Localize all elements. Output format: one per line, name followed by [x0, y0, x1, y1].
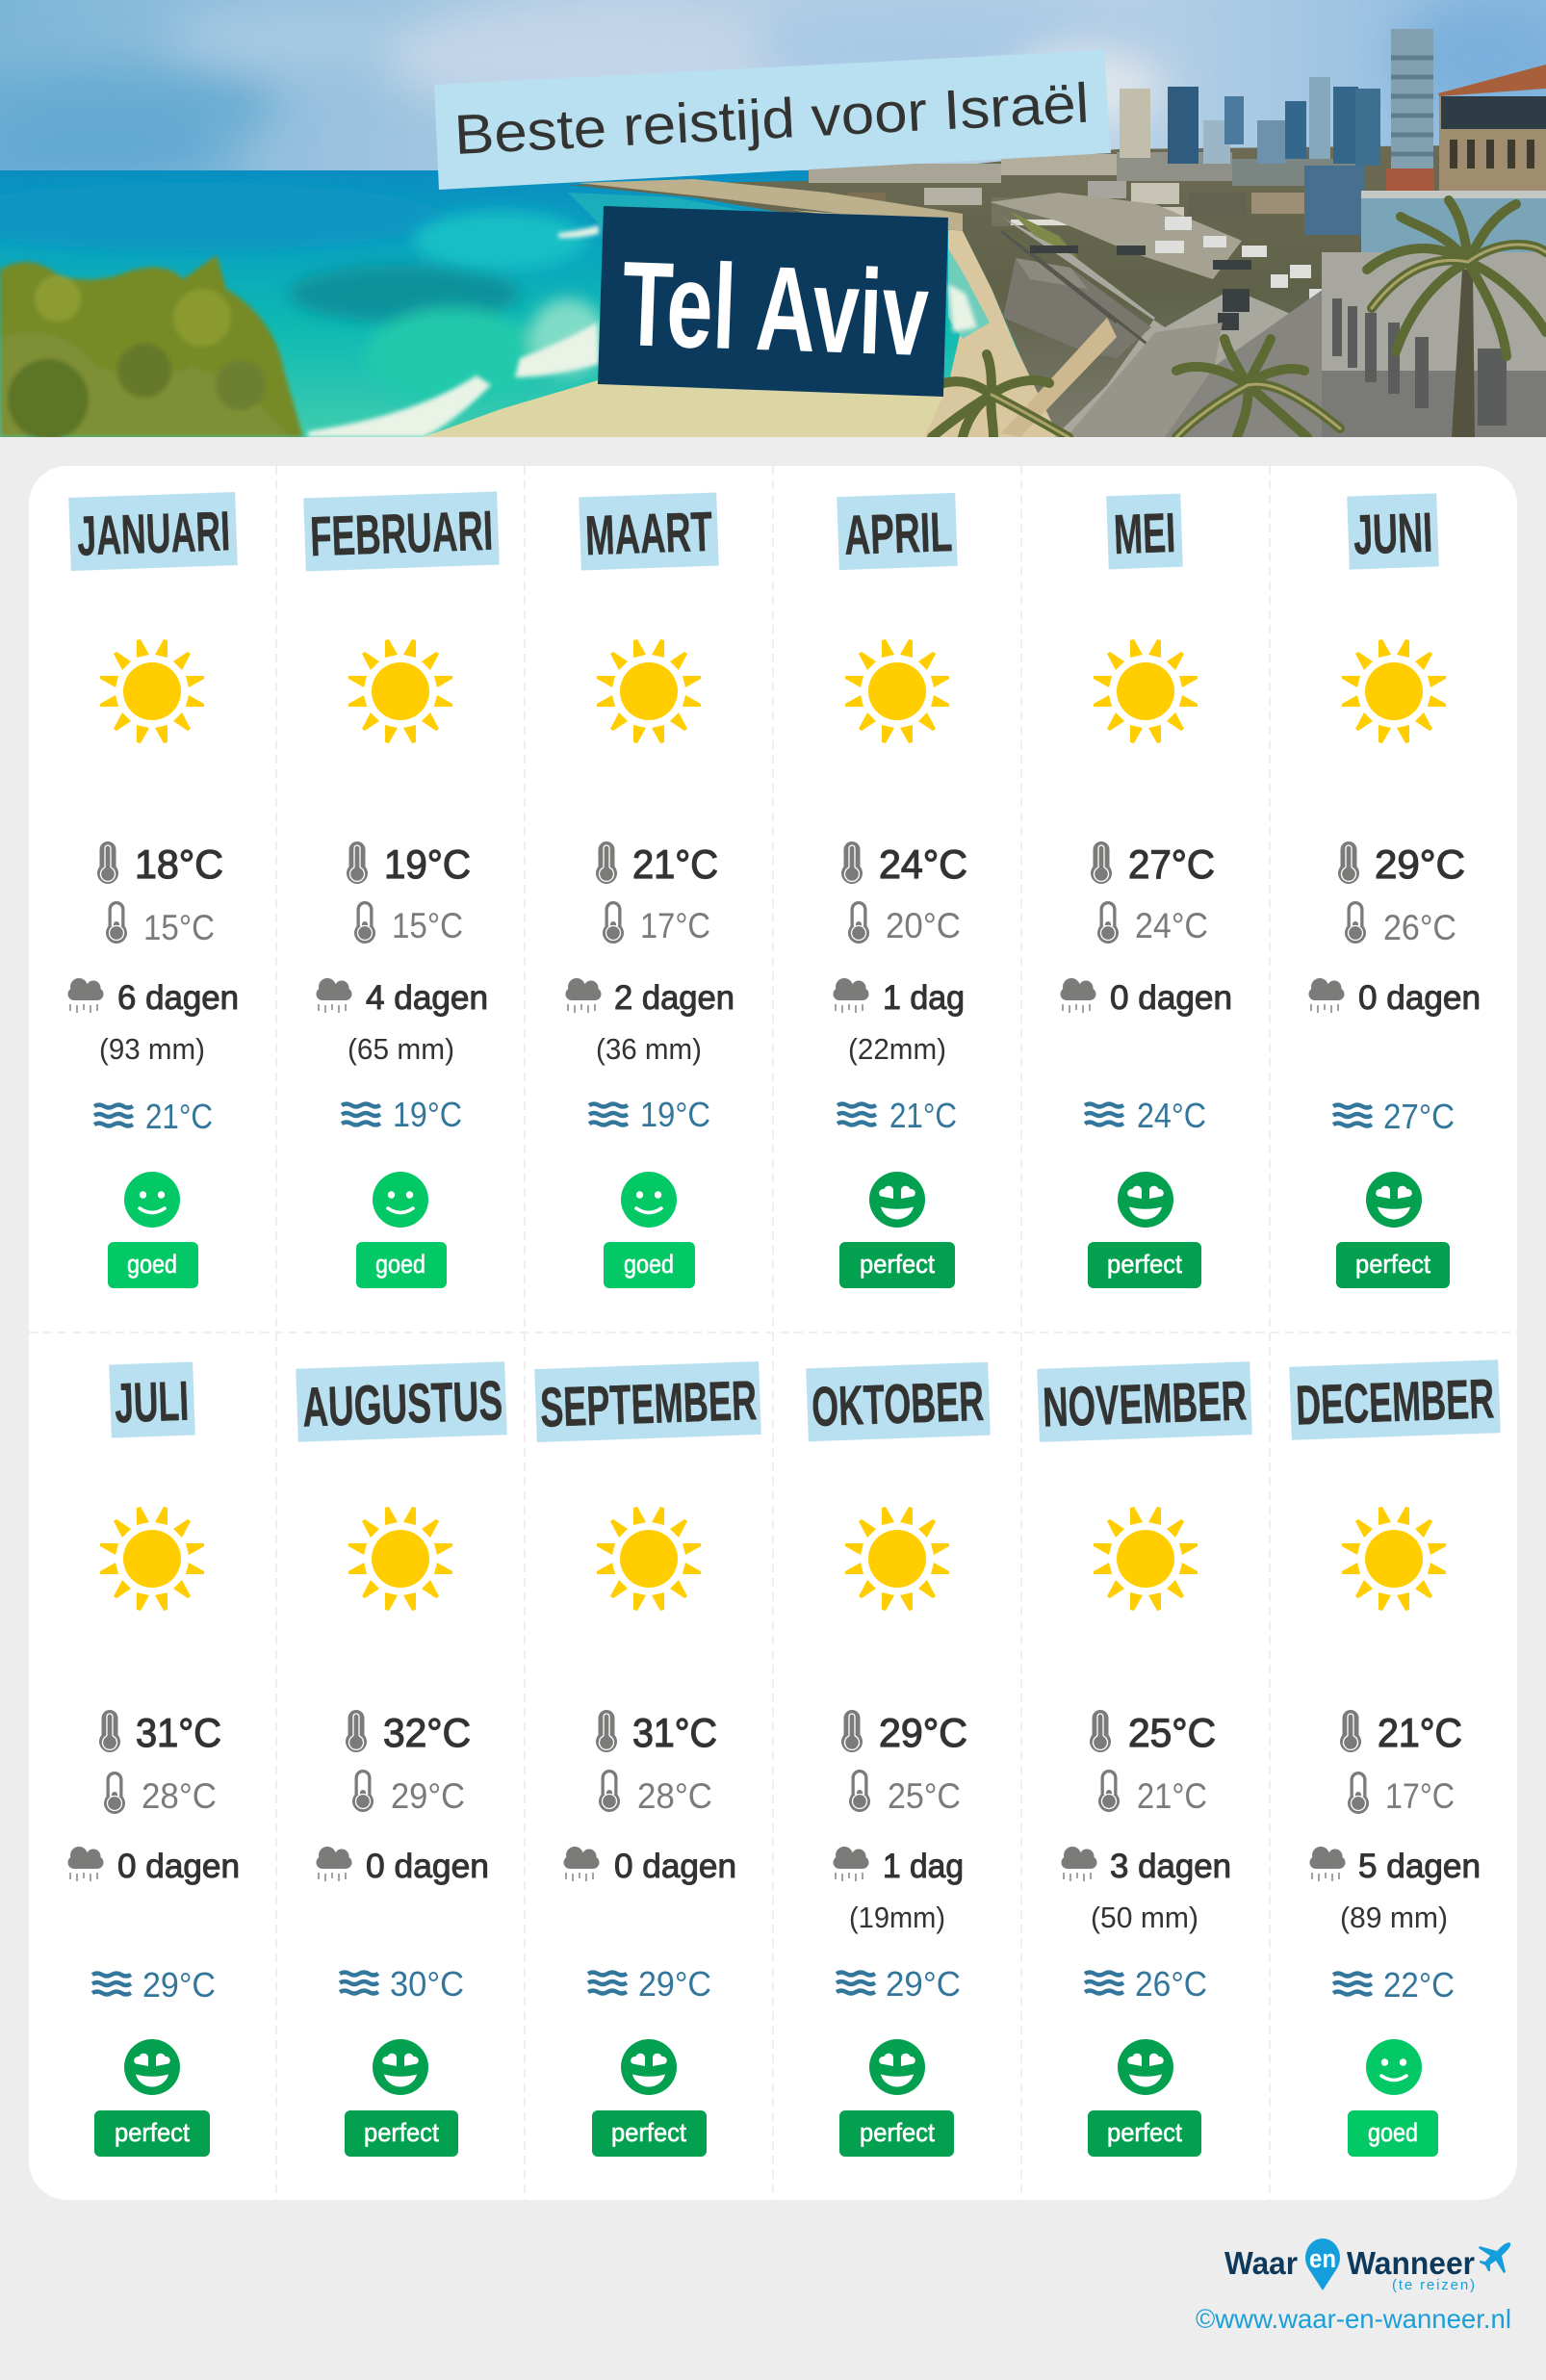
- rain days: 0 dagen: [1110, 979, 1232, 1017]
- icon: perfect face: [1366, 1172, 1422, 1228]
- glass building and right building: [1361, 198, 1546, 252]
- icon: thermometer max: [97, 841, 118, 884]
- icon: rain cloud: [564, 1847, 599, 1881]
- min temperature: 21°C: [1137, 1776, 1207, 1816]
- rating tag: perfect: [115, 2118, 190, 2147]
- panel: oktober: [806, 1362, 991, 2157]
- min temperature: 28°C: [142, 1776, 217, 1816]
- min temperature: 29°C: [391, 1776, 465, 1816]
- icon: good face: [124, 1172, 180, 1228]
- rating tag: perfect: [860, 2118, 935, 2147]
- min temperature: 24°C: [1135, 906, 1208, 945]
- max temperature: 25°C: [1128, 1710, 1216, 1755]
- icon: rain cloud: [834, 978, 868, 1013]
- rain days: 2 dagen: [614, 979, 734, 1017]
- max temperature: 27°C: [1128, 841, 1215, 887]
- icon: perfect face: [373, 2039, 428, 2095]
- icon: sun: [348, 639, 452, 743]
- icon: perfect face: [1118, 2039, 1173, 2095]
- panel: juni: [1309, 493, 1481, 1288]
- icon: thermometer min: [599, 1770, 620, 1812]
- icon: waves: [1333, 1974, 1372, 1995]
- month label: [68, 492, 238, 571]
- icon: airplane: [1479, 2242, 1510, 2273]
- city banner: [598, 206, 948, 397]
- icon: sun: [597, 1507, 701, 1611]
- icon: sun: [845, 639, 949, 743]
- rating tag: [592, 2110, 707, 2157]
- rainfall: (36 mm): [596, 1032, 702, 1066]
- icon: waves: [340, 1972, 378, 1993]
- logo: Waar en Wanneer: Wanneer: [1347, 2245, 1475, 2281]
- rating tag: perfect: [1355, 1250, 1430, 1279]
- icon: rain cloud: [1309, 1847, 1346, 1881]
- sea temperature: 24°C: [1137, 1096, 1206, 1135]
- icon: waves: [94, 1105, 133, 1126]
- rating tag: [839, 2110, 954, 2157]
- panel: september: [534, 1361, 761, 2157]
- rating tag: goed: [375, 1250, 425, 1279]
- icon: thermometer min: [849, 1770, 870, 1812]
- sea temperature: 30°C: [390, 1964, 464, 2004]
- panel: november: [1037, 1361, 1252, 2157]
- rainfall: (89 mm): [1340, 1901, 1448, 1934]
- month label: [109, 1362, 195, 1437]
- icon: thermometer max: [99, 1710, 120, 1752]
- icon: thermometer min: [1345, 901, 1366, 944]
- rating tag: [345, 2110, 458, 2157]
- rating tag: [1348, 2110, 1438, 2157]
- icon: thermometer min: [1348, 1772, 1369, 1814]
- month label: [303, 492, 500, 571]
- skyline: [1120, 29, 1433, 168]
- rain days: 5 dagen: [1358, 1848, 1481, 1885]
- rating tag: goed: [1368, 2118, 1418, 2147]
- trees foreground: [0, 255, 303, 440]
- icon: sun: [348, 1507, 452, 1611]
- icon: sun: [1094, 1507, 1198, 1611]
- icon: sun: [1094, 639, 1198, 743]
- sea temperature: 29°C: [886, 1964, 961, 2004]
- logo: Waar en Wanneer: (te reizen): [1392, 2277, 1475, 2293]
- month label: MEI: [1113, 502, 1176, 566]
- month label: [1347, 493, 1439, 570]
- city land: [568, 145, 1439, 428]
- max temperature: 21°C: [632, 841, 718, 887]
- icon: thermometer min: [104, 1772, 125, 1814]
- sea temperature: 21°C: [145, 1097, 213, 1136]
- title text: Beste reistijd voor Israël: [452, 72, 1091, 167]
- sea temperature: 21°C: [889, 1096, 957, 1135]
- icon: rain cloud: [566, 978, 601, 1013]
- icon: thermometer min: [1098, 1770, 1120, 1812]
- max temperature: 29°C: [1375, 841, 1465, 887]
- icon: thermometer max: [1338, 841, 1359, 884]
- month label: [1037, 1361, 1252, 1442]
- icon: rain cloud: [67, 978, 104, 1013]
- icon: perfect face: [869, 2039, 925, 2095]
- icon: good face: [621, 1172, 677, 1228]
- icon: rain cloud: [1061, 1847, 1097, 1881]
- icon: waves: [1085, 1103, 1123, 1125]
- panel: maart: [566, 493, 734, 1288]
- rain days: 4 dagen: [366, 979, 488, 1017]
- icon: good face: [1366, 2039, 1422, 2095]
- month label: JANUARI: [76, 500, 231, 568]
- month label: [534, 1361, 761, 1442]
- sea temperature: 19°C: [640, 1095, 710, 1134]
- min temperature: 25°C: [888, 1776, 961, 1816]
- panel: december: [1289, 1359, 1501, 2157]
- logo: Waar en Wanneer: en: [1309, 2244, 1336, 2273]
- min temperature: 15°C: [143, 908, 215, 947]
- rain days: 1 dag: [883, 1848, 964, 1885]
- max temperature: 19°C: [384, 841, 471, 887]
- icon: thermometer max: [841, 1710, 863, 1752]
- rating tag: perfect: [1107, 2118, 1182, 2147]
- min temperature: 17°C: [640, 906, 710, 945]
- palm trees: [1452, 270, 1475, 437]
- month label: [806, 1362, 991, 1441]
- min temperature: 20°C: [886, 906, 961, 945]
- icon: thermometer max: [346, 1710, 367, 1752]
- icon: rain cloud: [316, 978, 352, 1013]
- min temperature: 28°C: [637, 1776, 712, 1816]
- rain days: 0 dagen: [1358, 979, 1481, 1017]
- month label: FEBRUARI: [309, 500, 494, 568]
- icon: thermometer min: [106, 901, 127, 944]
- icon: rain cloud: [67, 1847, 104, 1881]
- low city blocks: [809, 152, 1434, 235]
- rating tag: goed: [127, 1250, 177, 1279]
- rainfall: (65 mm): [348, 1032, 454, 1066]
- min temperature: 26°C: [1383, 908, 1456, 947]
- panel: mei: [1061, 494, 1232, 1288]
- people and cars: [1155, 217, 1322, 298]
- panel: april: [834, 493, 967, 1288]
- sea temperature: 29°C: [142, 1965, 216, 2005]
- website url: ©www.waar-en-wanneer.nl: [1196, 2304, 1511, 2334]
- max temperature: 31°C: [632, 1710, 717, 1755]
- month label: [579, 493, 719, 570]
- month label: SEPTEMBER: [539, 1369, 758, 1439]
- month label: JULI: [114, 1370, 190, 1435]
- sand beaches: [789, 210, 1059, 437]
- icon: thermometer min: [848, 901, 869, 944]
- max temperature: 24°C: [879, 841, 967, 887]
- teal strip and foam: [948, 248, 990, 339]
- month label: [1106, 494, 1183, 569]
- icon: thermometer max: [596, 841, 617, 884]
- rating tag: perfect: [1107, 1250, 1182, 1279]
- coastal wall and promenade: [992, 212, 1300, 437]
- panel: januari: [67, 492, 239, 1288]
- icon: sun: [1342, 1507, 1446, 1611]
- tan building with roof: [1439, 96, 1546, 197]
- rating tag: [356, 1242, 447, 1288]
- icon: waves: [837, 1972, 875, 1993]
- icon: perfect face: [621, 2039, 677, 2095]
- rain days: 1 dag: [883, 979, 965, 1017]
- rainfall: (19mm): [849, 1901, 945, 1934]
- max temperature: 32°C: [383, 1710, 471, 1755]
- rainfall: (50 mm): [1091, 1901, 1198, 1934]
- icon: thermometer max: [1091, 841, 1112, 884]
- logo: Waar en Wanneer: Waar: [1224, 2245, 1298, 2281]
- city name: Tel Aviv: [620, 237, 931, 381]
- rain days: 0 dagen: [366, 1848, 489, 1885]
- rating tag: [94, 2110, 210, 2157]
- icon: sun: [597, 639, 701, 743]
- logo: Waar en Wanneer: [1224, 2238, 1510, 2293]
- icon: thermometer max: [1090, 1710, 1111, 1752]
- month label: NOVEMBER: [1042, 1369, 1248, 1439]
- rating tag: [1336, 1242, 1450, 1288]
- icon: map pin: [1305, 2238, 1340, 2290]
- rainfall: (22mm): [848, 1032, 946, 1066]
- month label: MAART: [584, 501, 713, 567]
- icon: waves: [837, 1103, 876, 1125]
- icon: thermometer min: [352, 1770, 374, 1812]
- rain days: 6 dagen: [117, 979, 239, 1017]
- month label: [837, 493, 958, 570]
- rating tag: goed: [624, 1250, 674, 1279]
- rating tag: perfect: [364, 2118, 439, 2147]
- sea temperature: 19°C: [393, 1095, 462, 1134]
- icon: perfect face: [869, 1172, 925, 1228]
- icon: waves: [588, 1972, 627, 1993]
- icon: waves: [92, 1974, 131, 1995]
- month label: [296, 1361, 507, 1442]
- icon: thermometer min: [1097, 901, 1119, 944]
- icon: waves: [1085, 1972, 1123, 1993]
- sea temperature: 26°C: [1135, 1964, 1207, 2004]
- icon: perfect face: [1118, 1172, 1173, 1228]
- min temperature: 17°C: [1385, 1776, 1455, 1816]
- icon: waves: [342, 1103, 380, 1125]
- icon: thermometer min: [354, 901, 375, 944]
- icon: sun: [100, 639, 204, 743]
- rain days: 0 dagen: [117, 1848, 240, 1885]
- calendar card: [29, 466, 1517, 2200]
- icon: perfect face: [124, 2039, 180, 2095]
- rating tag: [604, 1242, 695, 1288]
- month label: APRIL: [843, 501, 953, 567]
- icon: rain cloud: [1309, 978, 1344, 1013]
- sea temperature: 27°C: [1383, 1097, 1455, 1136]
- panel: februari: [303, 492, 500, 1288]
- rating tag: perfect: [611, 2118, 686, 2147]
- month label: JUNI: [1353, 502, 1433, 566]
- max temperature: 29°C: [879, 1710, 967, 1755]
- icon: thermometer max: [347, 841, 368, 884]
- rain days: 3 dagen: [1110, 1848, 1231, 1885]
- icon: thermometer max: [841, 841, 863, 884]
- rainfall: (93 mm): [99, 1032, 205, 1066]
- max temperature: 21°C: [1378, 1710, 1462, 1755]
- sea temperature: 22°C: [1383, 1965, 1455, 2005]
- rating tag: [839, 1242, 955, 1288]
- header photo: Tel Aviv coast: [0, 0, 1546, 440]
- icon: thermometer max: [596, 1710, 617, 1752]
- icon: waves: [589, 1103, 628, 1125]
- icon: sun: [1342, 639, 1446, 743]
- max temperature: 18°C: [135, 841, 223, 887]
- icon: rain cloud: [1061, 978, 1095, 1013]
- month label: OKTOBER: [811, 1370, 985, 1438]
- icon: good face: [373, 1172, 428, 1228]
- icon: waves: [1333, 1105, 1372, 1126]
- icon: sun: [100, 1507, 204, 1611]
- icon: rain cloud: [834, 1847, 868, 1881]
- panel: juli: [67, 1362, 240, 2157]
- rain days: 0 dagen: [614, 1848, 736, 1885]
- min temperature: 15°C: [392, 906, 463, 945]
- month label: AUGUSTUS: [301, 1369, 503, 1439]
- icon: thermometer max: [1340, 1710, 1361, 1752]
- icon: sun: [845, 1507, 949, 1611]
- sea temperature: 29°C: [638, 1964, 711, 2004]
- rating tag: [1088, 2110, 1201, 2157]
- max temperature: 31°C: [136, 1710, 221, 1755]
- panel: augustus: [296, 1361, 507, 2157]
- icon: thermometer min: [603, 901, 624, 944]
- rating tag: [108, 1242, 198, 1288]
- rating tag: perfect: [860, 1250, 935, 1279]
- rating tag: [1088, 1242, 1201, 1288]
- icon: rain cloud: [316, 1847, 352, 1881]
- title banner: [434, 50, 1111, 190]
